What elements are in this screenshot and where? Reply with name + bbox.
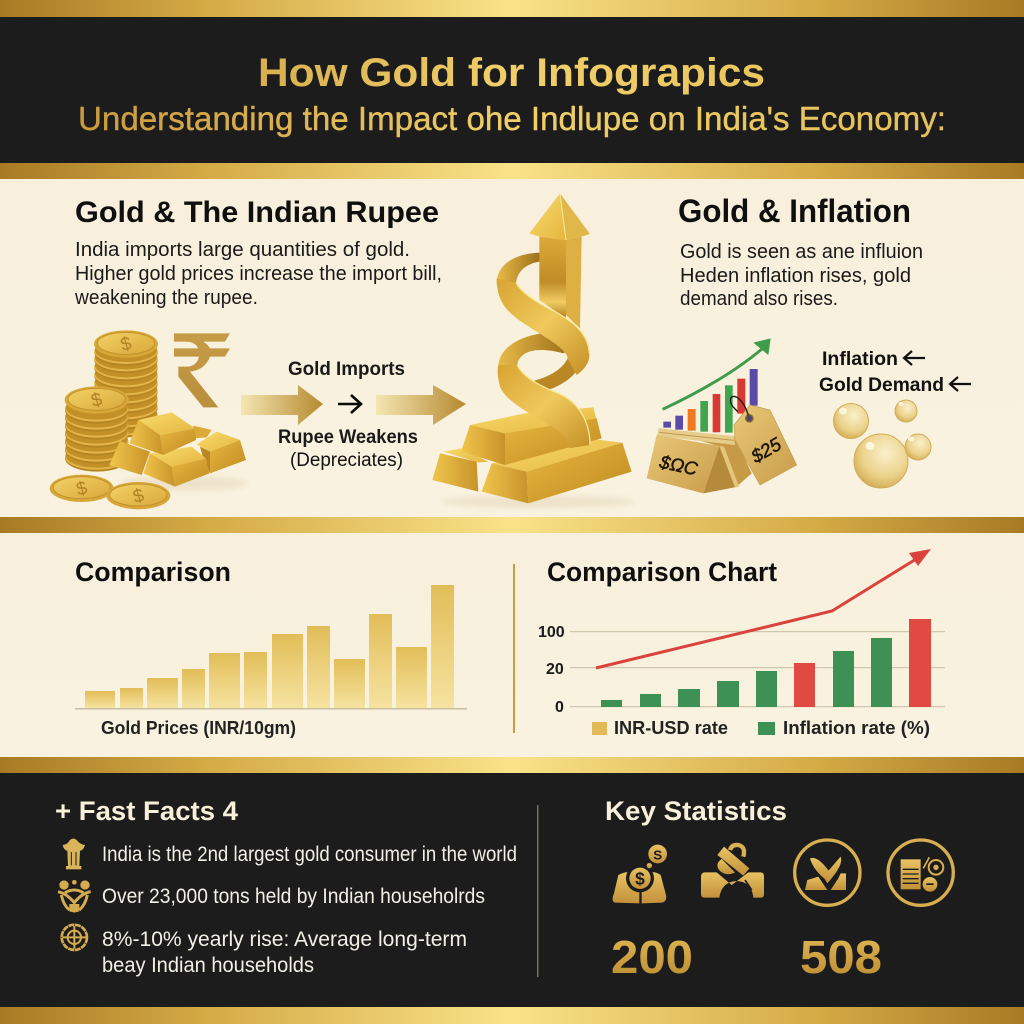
fact text: yearly rise: 8%-10% yearly rise: Average long-term: [102, 928, 467, 951]
icon: document and target circle: [888, 840, 953, 905]
arrow: to imports: [241, 385, 323, 425]
icon: money bag: [613, 845, 667, 903]
fact text: consumer: India is the 2nd largest gold consumer in the world: [102, 843, 517, 866]
icon: coin stacks: [65, 330, 158, 472]
heading: comparison chart: Comparison Chart: [547, 557, 777, 587]
rupee description: India imports large quantities of gold.: [75, 239, 410, 261]
inflation and demand labels: Gold Demand: [819, 375, 944, 396]
icon: inflation chart with price tags: $25: [746, 433, 785, 468]
icon: gold bubbles: [834, 400, 931, 488]
statistic: 200: 200: [611, 931, 693, 983]
icon: gold bars: [109, 412, 247, 491]
fact text: households: Over 23,000 tons held by Indian householrds: [102, 885, 485, 908]
fact text: yearly rise: [102, 928, 467, 977]
chart label: Gold Prices (INR/10gm): [101, 718, 296, 738]
flow labels: Rupee Weakens: [278, 427, 418, 448]
axis labels: 20: [546, 661, 564, 678]
inflation description: demand also rises.: [680, 288, 838, 310]
statistic: 508: 508: [800, 931, 882, 983]
panel: comparison chart: [538, 549, 945, 738]
inflation and demand labels: [819, 349, 971, 396]
panel: fast facts: [55, 796, 517, 977]
fact text: yearly rise: beay Indian households: [102, 954, 314, 977]
axis labels: 0: [555, 699, 564, 716]
inflation description: Heden inflation rises, gold: [680, 265, 911, 287]
rupee description: [74, 239, 442, 309]
arrow: black connector: [338, 395, 361, 413]
panel: gold and inflation: [647, 193, 971, 493]
bars: rate comparison: [601, 619, 931, 707]
icon: crossed tools circle: [795, 840, 860, 905]
icon: inflation chart with price tags: [647, 338, 797, 493]
heading: key statistics: Key Statistics: [605, 796, 787, 826]
icon: money bag: $: [635, 869, 645, 889]
flow labels: (Depreciates): [290, 450, 403, 471]
header: [78, 51, 946, 137]
gold bar stack: [432, 407, 635, 508]
axis labels: [538, 624, 565, 716]
bar chart: gold prices: [85, 585, 454, 708]
arrow: to rupee weakens: [376, 385, 466, 425]
title: How Gold for Infograpics: [258, 51, 765, 95]
icon: coin stacks: $: [89, 388, 105, 411]
heading: gold and the Indian rupee: Gold & The Indian Rupee: [75, 196, 439, 229]
heading: gold and inflation: Gold & Inflation: [678, 193, 911, 229]
icon: coin stacks: $: [118, 332, 134, 355]
icon: people: [58, 880, 91, 913]
illustration: gold spiral arrow on bars: [432, 193, 635, 508]
flow labels: [278, 359, 418, 471]
icon: ornate circle: [62, 925, 87, 950]
subtitle: Understanding the Impact ohe Indlupe on India's Economy:: [78, 100, 946, 137]
icon: loose coins: $: [74, 477, 90, 500]
icon: inflation chart with price tags: $ΩC: [657, 451, 700, 480]
trend line arrow: [596, 549, 931, 668]
icon: national emblem: [63, 839, 85, 869]
spiral arrow: [497, 193, 590, 448]
icon: loose coins: [50, 475, 170, 509]
panel: gold and the rupee: [50, 196, 466, 509]
panel: comparison bars: [75, 557, 467, 738]
rupee description: Higher gold prices increase the import bill,: [75, 263, 442, 285]
icon: rupee symbol: [174, 333, 230, 407]
axis labels: 100: [538, 624, 565, 641]
legend: INR-USD rate: [614, 718, 728, 738]
legend: [592, 718, 930, 738]
icon: tools: [701, 845, 764, 898]
inflation description: Gold is seen as ane influion: [680, 241, 923, 263]
icon: loose coins: $: [131, 484, 147, 507]
icon: money bag: S: [653, 847, 662, 862]
inflation description: [680, 241, 923, 310]
rupee description: weakening the rupee.: [74, 287, 258, 309]
heading: comparison: Comparison: [75, 557, 231, 587]
heading: fast facts: + Fast Facts 4: [55, 796, 238, 826]
panel: key statistics: [605, 796, 953, 983]
inflation and demand labels: Inflation: [822, 349, 898, 370]
legend: Inflation rate (%): [783, 718, 930, 738]
flow labels: Gold Imports: [288, 359, 405, 380]
